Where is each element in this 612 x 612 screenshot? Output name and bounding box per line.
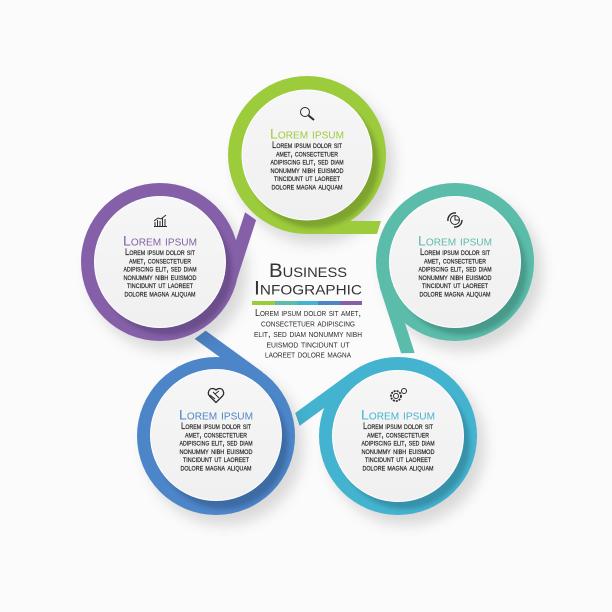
- center description: [254, 308, 362, 360]
- body text: adipiscing elit, sed diam: [180, 438, 252, 448]
- icon: cycle clock: [448, 213, 462, 227]
- body text: amet, consectetuer: [424, 255, 487, 265]
- ring shadow: [89, 193, 247, 351]
- body text: amet, consectetuer: [129, 255, 192, 265]
- body text: adipiscing elit, sed diam: [362, 438, 434, 448]
- content: [270, 108, 344, 192]
- ring shadow: [384, 193, 542, 351]
- disc shadow: [397, 205, 527, 335]
- body text: adipiscing elit, sed diam: [270, 157, 344, 167]
- panel: step 3 cyan: [295, 357, 485, 525]
- content: [418, 213, 492, 299]
- title: Business: [269, 260, 347, 282]
- body text: nonummy nibh euismod: [124, 272, 197, 282]
- center description: laoreet dolore magna: [265, 350, 351, 360]
- body text: nonummy nibh euismod: [362, 446, 435, 456]
- body text: [362, 421, 435, 473]
- white disc: [390, 196, 520, 328]
- body text: Lorem ipsum dolor sit: [125, 247, 195, 257]
- body text: adipiscing elit, sed diam: [124, 264, 196, 274]
- heading: Lorem ipsum: [123, 232, 197, 248]
- heading: Lorem ipsum: [179, 406, 253, 422]
- icon: gears: [391, 388, 406, 401]
- panel: step 4 blue: [137, 331, 303, 525]
- disc shadow: [340, 379, 470, 509]
- body text: [124, 247, 197, 299]
- ring with tail: [295, 357, 477, 515]
- heading: Lorem ipsum: [418, 232, 492, 248]
- body text: [180, 421, 253, 473]
- body text: nonummy nibh euismod: [270, 165, 344, 175]
- disc shadow: [249, 98, 379, 228]
- body text: [418, 247, 492, 299]
- body text: tincidunt ut laoreet: [274, 173, 340, 183]
- body text: amet, consectetuer: [367, 429, 430, 439]
- white disc: [94, 196, 226, 328]
- disc shadow: [158, 379, 288, 509]
- title: Infographic: [254, 277, 362, 299]
- icon: magnifier: [300, 108, 314, 120]
- body text: Lorem ipsum dolor sit: [181, 421, 251, 431]
- body text: dolore magna aliquam: [124, 289, 196, 299]
- icon: handshake heart: [208, 388, 224, 402]
- body text: adipiscing elit, sed diam: [418, 264, 492, 274]
- center description: consectetuer adipiscing: [261, 318, 355, 330]
- content: [361, 388, 435, 473]
- white disc: [332, 370, 464, 502]
- ring with tail: [228, 76, 386, 234]
- body text: Lorem ipsum dolor sit: [363, 421, 433, 431]
- title: [254, 260, 362, 299]
- body text: tincidunt ut laoreet: [365, 454, 431, 464]
- body text: tincidunt ut laoreet: [422, 280, 488, 290]
- ring shadow: [327, 367, 485, 525]
- body text: amet, consectetuer: [185, 429, 248, 439]
- ring shadow: [145, 367, 303, 525]
- center description: Lorem ipsum dolor sit amet,: [255, 308, 361, 319]
- body text: dolore magna aliquam: [180, 463, 252, 473]
- body text: tincidunt ut laoreet: [127, 280, 193, 290]
- content: [179, 388, 253, 473]
- body text: dolore magna aliquam: [272, 182, 342, 192]
- heading: Lorem ipsum: [361, 406, 435, 422]
- ring with tail: [81, 183, 256, 341]
- body text: dolore magna aliquam: [420, 289, 490, 299]
- body text: Lorem ipsum dolor sit: [272, 140, 342, 150]
- content: [123, 215, 197, 299]
- ring with tail: [376, 183, 534, 353]
- ring with tail: [137, 331, 295, 515]
- body text: tincidunt ut laoreet: [183, 454, 249, 464]
- center description: euismod tincidunt ut: [266, 340, 350, 350]
- body text: Lorem ipsum dolor sit: [420, 247, 490, 257]
- disc shadow: [102, 205, 232, 335]
- panel: step 1 green: [228, 76, 394, 244]
- panel: step 5 purple: [81, 183, 256, 351]
- body text: amet, consectetuer: [276, 148, 339, 158]
- body text: dolore magna aliquam: [362, 463, 434, 473]
- icon: bar chart: [154, 215, 167, 226]
- body text: nonummy nibh euismod: [418, 272, 492, 282]
- body text: nonummy nibh euismod: [180, 446, 253, 456]
- center description: elit, sed diam nonummy nibh: [254, 329, 362, 340]
- heading: Lorem ipsum: [270, 126, 344, 142]
- panel: step 2 teal: [376, 183, 542, 353]
- ring shadow: [236, 86, 394, 244]
- colour bar: [252, 301, 362, 305]
- white disc: [150, 370, 282, 500]
- body text: [270, 140, 344, 192]
- white disc: [242, 90, 372, 220]
